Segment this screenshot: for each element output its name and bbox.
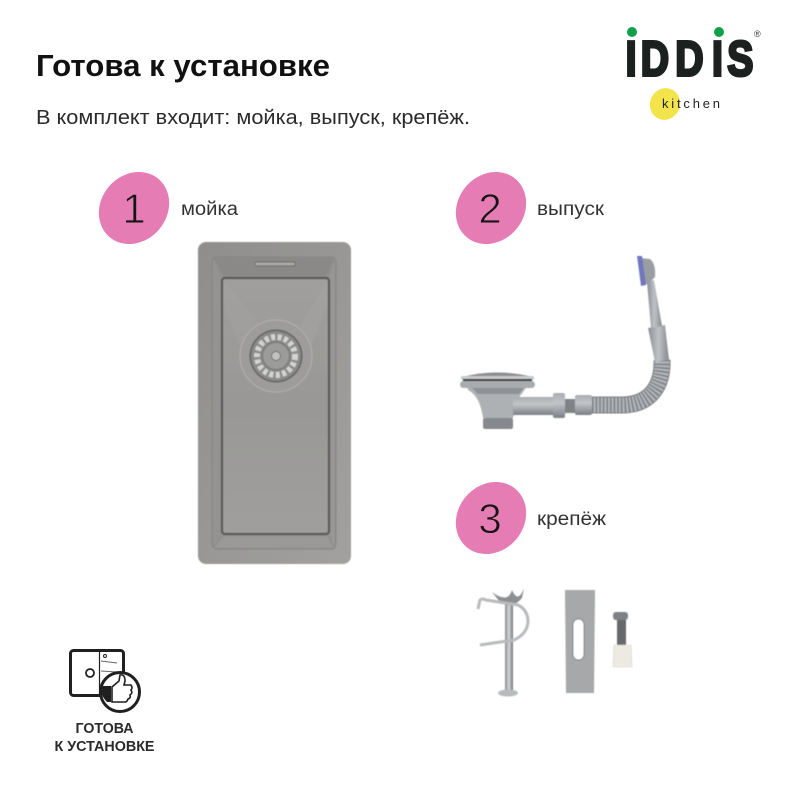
- icon caption: К УСТАНОВКЕ: [54, 739, 155, 755]
- nut right: [575, 395, 592, 415]
- icon thumb: [112, 675, 132, 702]
- logo: IDDIS kitchen: [626, 27, 761, 125]
- badge 2: 2: [478, 185, 502, 232]
- subtitle: В комплект входит: мойка, выпуск, крепёж.: [36, 106, 470, 129]
- sink photo: [198, 242, 351, 564]
- sink floor: [222, 278, 329, 534]
- overflow head: [640, 258, 655, 284]
- strainer funnel: [468, 385, 528, 418]
- title: Готова к установке: [36, 48, 330, 83]
- corrugated hose: [590, 360, 662, 405]
- drain: [240, 320, 312, 392]
- icon caption: [54, 721, 155, 755]
- strainer rim: [461, 372, 534, 379]
- upper tube: [647, 280, 662, 328]
- drain assembly photo: [460, 256, 669, 429]
- blue gasket: [637, 256, 646, 286]
- bracket plate: [565, 590, 595, 693]
- badge 1: 1: [122, 185, 146, 232]
- screw: [613, 612, 632, 667]
- icon caption: ГОТОВА: [76, 721, 134, 737]
- icon cabinet: [70, 650, 124, 696]
- sink bowl walls: [212, 257, 336, 549]
- registered mark: ®: [754, 29, 761, 39]
- icon small details: [101, 654, 117, 672]
- logo wordmark: IDDIS: [626, 32, 753, 87]
- badge 1: [84, 158, 184, 258]
- mounting hardware photo: [478, 588, 632, 696]
- icon cuff: [101, 686, 111, 702]
- drain collar: [483, 418, 513, 429]
- icon: ready to install: [70, 650, 140, 712]
- coupling: [648, 325, 669, 362]
- overflow slot: [255, 262, 295, 266]
- nut left: [553, 393, 565, 418]
- label: крепёж: крепёж: [537, 509, 606, 530]
- badge 3: [441, 468, 541, 568]
- sink rim: [198, 242, 351, 564]
- badge 3: 3: [478, 495, 502, 542]
- logo dot left: [627, 27, 637, 37]
- badge 2: [441, 158, 541, 258]
- label: мойка: мойка: [181, 199, 238, 220]
- icon divider: [98, 651, 100, 695]
- logo yellow blob: [645, 83, 685, 125]
- label: выпуск: выпуск: [537, 199, 605, 220]
- side pipe: [513, 397, 554, 415]
- pipe section: [565, 399, 576, 413]
- icon sink circle: [86, 669, 94, 677]
- clamp bolt: [478, 588, 528, 696]
- logo kitchen word: kitchen: [662, 96, 720, 111]
- icon thumb badge: [100, 672, 140, 712]
- logo dot right: [714, 27, 724, 37]
